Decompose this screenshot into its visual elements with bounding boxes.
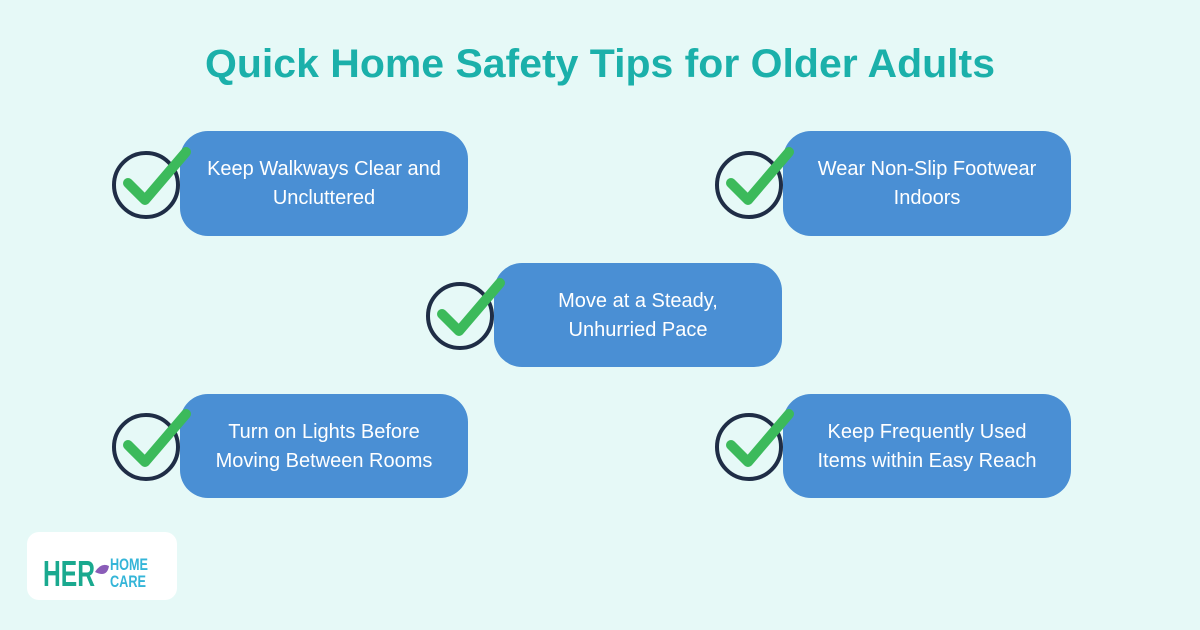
icon: check — [731, 152, 789, 200]
tip: walkways — [114, 131, 468, 236]
tip: pace: Move at a Steady, — [558, 290, 718, 312]
logo — [27, 532, 177, 600]
tip: walkways: Uncluttered — [273, 187, 375, 209]
logo: CARE — [110, 572, 146, 591]
tip: footwear — [717, 131, 1071, 236]
tip: lights: Moving Between Rooms — [216, 450, 432, 472]
tip: walkways: Keep Walkways Clear and — [207, 158, 441, 180]
tip: pace — [428, 263, 782, 367]
tip: reach: Items within Easy Reach — [818, 450, 1036, 472]
tip: footwear: Indoors — [894, 187, 960, 209]
tip: footwear: Wear Non-Slip Footwear — [818, 158, 1037, 180]
icon: check — [731, 414, 789, 462]
tip: pace: Unhurried Pace — [569, 319, 707, 341]
icon: check — [128, 152, 186, 200]
tip: lights — [114, 394, 468, 498]
title: Quick Home Safety Tips for Older Adults — [205, 42, 995, 86]
tip: reach — [717, 394, 1071, 498]
icon: check — [442, 283, 500, 331]
logo: HOME — [110, 555, 148, 574]
tip: lights: Turn on Lights Before — [228, 421, 420, 443]
logo: HER — [43, 553, 95, 594]
tip: reach: Keep Frequently Used — [827, 421, 1027, 443]
icon: check — [128, 414, 186, 462]
